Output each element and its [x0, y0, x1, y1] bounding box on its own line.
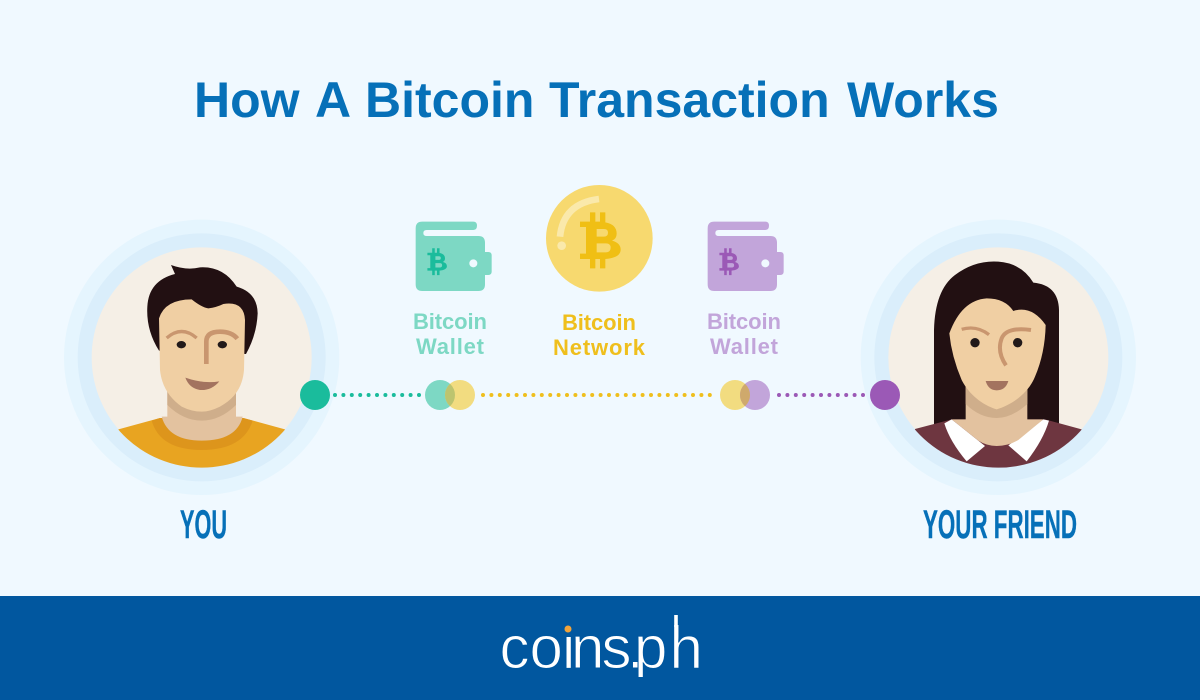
label: right bitcoin wallet: Wallet	[710, 334, 779, 359]
label: your friend: YOUR FRIEND	[923, 503, 1077, 547]
flow: network dotted line	[483, 393, 714, 397]
label: right bitcoin wallet	[707, 309, 781, 359]
label: bitcoin network: Bitcoin	[562, 310, 636, 335]
label: left bitcoin wallet: Bitcoin	[413, 309, 487, 334]
label: bitcoin network	[553, 310, 646, 360]
title: How	[194, 72, 300, 128]
label: left bitcoin wallet	[413, 309, 487, 359]
logo: coins.ph: coins.ph	[500, 614, 703, 681]
title: Works	[847, 72, 999, 128]
label: bitcoin network: Network	[553, 335, 646, 360]
footer bar	[0, 596, 1200, 700]
title: A	[315, 72, 350, 128]
avatar: your friend	[861, 220, 1136, 495]
label: you: YOU	[180, 503, 227, 547]
label: right bitcoin wallet: Bitcoin	[707, 309, 781, 334]
flow: network to wallet node	[720, 380, 770, 410]
icon: green bitcoin wallet	[416, 222, 492, 291]
flow: wallet to network node	[425, 380, 475, 410]
avatar: you	[64, 220, 339, 495]
icon: bitcoin coin	[546, 185, 653, 292]
icon: purple bitcoin wallet	[708, 222, 784, 291]
title: Transaction	[549, 72, 830, 128]
title: Bitcoin	[365, 72, 534, 128]
flow: you to wallet	[300, 380, 422, 410]
flow: wallet to friend	[779, 380, 900, 410]
label: left bitcoin wallet: Wallet	[416, 334, 485, 359]
